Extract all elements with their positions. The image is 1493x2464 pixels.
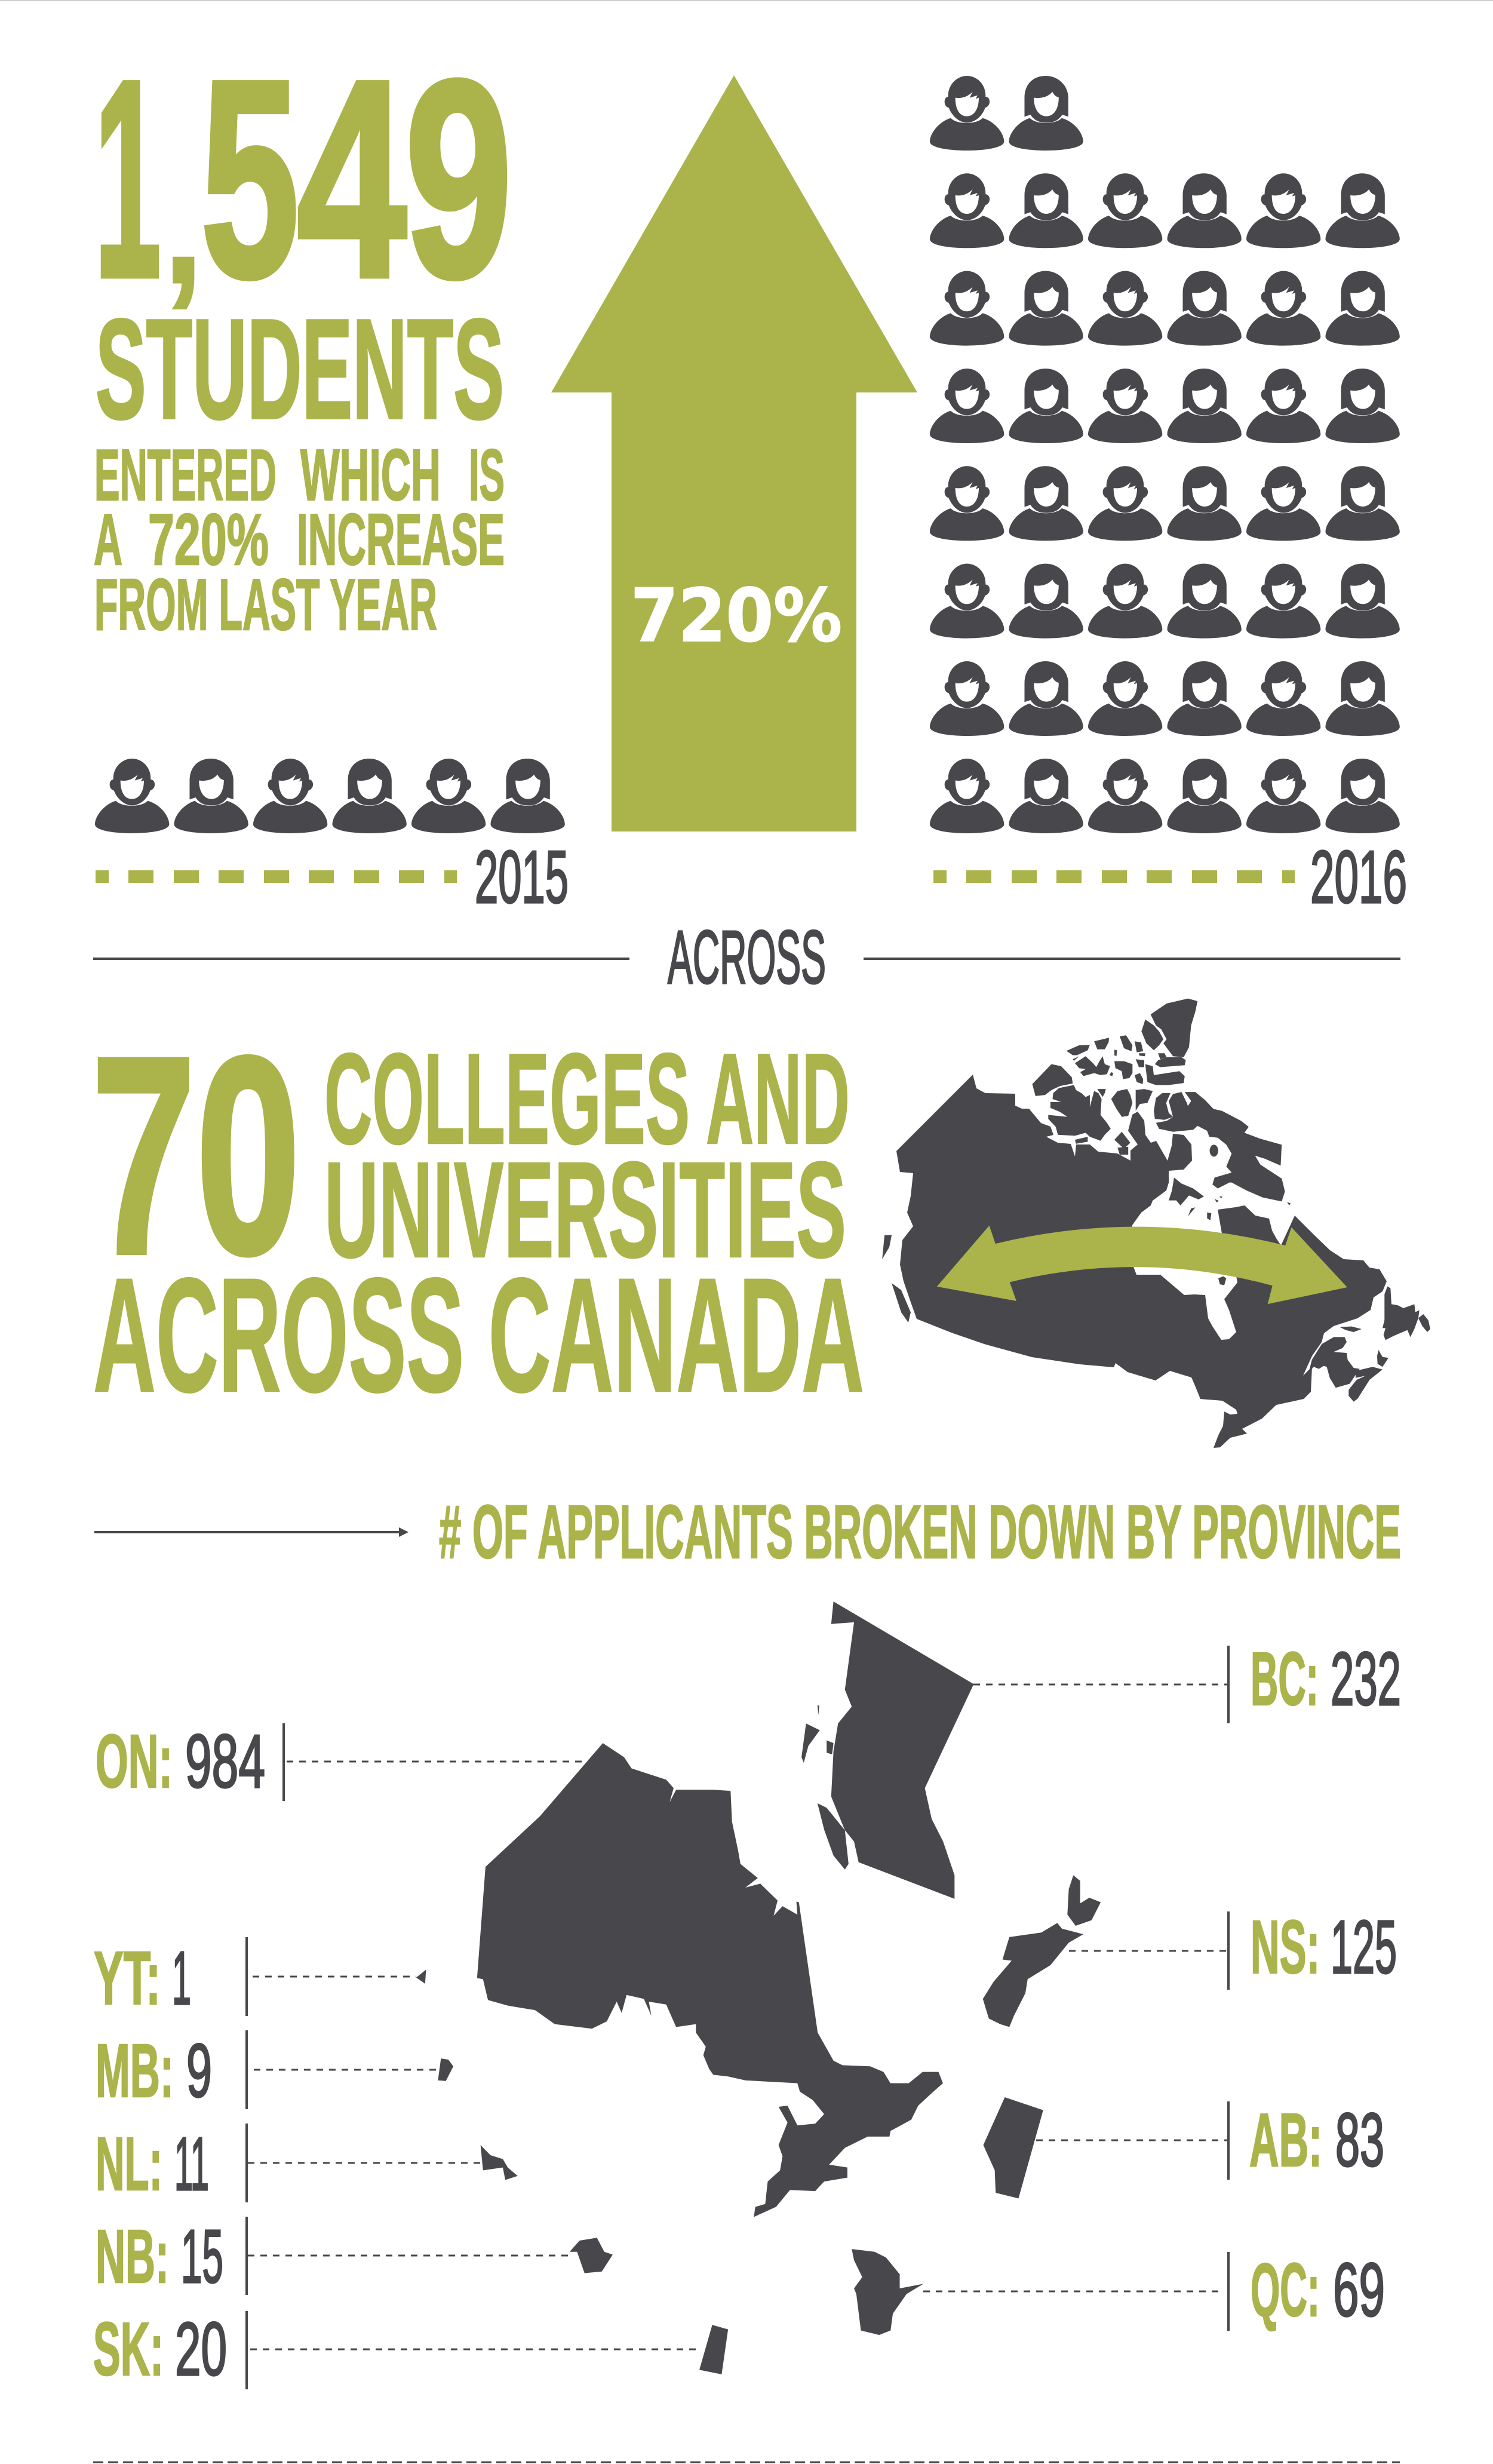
map piece: British Columbia — [801, 1601, 973, 1899]
people icons: 2016 grid — [930, 76, 1400, 833]
label: BC 232 — [973, 1637, 1401, 1723]
label: NB 15: NB: — [96, 2214, 169, 2299]
headline number: 1,549: 4 — [297, 22, 408, 336]
headline number: 1,549: 1 — [94, 22, 161, 336]
label: NB 15 — [96, 2214, 570, 2299]
map piece: Nova Scotia — [983, 1875, 1101, 2027]
people icons: 2015 row — [95, 759, 565, 833]
map piece: Manitoba — [438, 2058, 453, 2081]
label: NL 11: NL: — [96, 2122, 162, 2206]
headline number: 1,549: 9 — [405, 22, 512, 336]
label: NL 11: 11 — [174, 2122, 209, 2206]
map piece: Saskatchewan — [699, 2325, 728, 2374]
label: MB 9: MB: — [96, 2029, 174, 2113]
label: QC 69: 69 — [1333, 2248, 1385, 2332]
label: YT 1: YT: — [94, 1936, 161, 2020]
label: ON 984: 984 — [185, 1719, 265, 1803]
label: YT 1: 1 — [172, 1936, 191, 2020]
heading: 70 colleges and universities across Canada — [91, 999, 864, 1426]
arrow: upward increase with 720%: 720% — [631, 573, 842, 658]
text block: entered which is a 720% increase from last year: 720% — [148, 499, 269, 580]
text block: entered which is a 720% increase from last year: FROM LAST YEAR — [94, 564, 437, 645]
label: SK 20 — [93, 2307, 701, 2391]
label: ON 984: ON: — [96, 1719, 173, 1803]
label: NS 125: NS: — [1251, 1905, 1320, 1989]
timeline: 2015 — [96, 836, 569, 919]
Arctic islands — [1033, 999, 1291, 1220]
label: NL 11 — [96, 2122, 481, 2206]
label: AB 83: AB: — [1249, 2098, 1322, 2182]
heading: 70 colleges and universities across Canada: UNIVERSITIES — [324, 1134, 846, 1286]
label: BC 232: 232 — [1331, 1637, 1401, 1721]
double-headed arrow — [937, 1226, 1347, 1304]
map piece: Yukon — [416, 1969, 426, 1984]
section heading: number of applicants by province — [94, 1490, 1401, 1574]
headline number: 1,549: 5 — [201, 22, 299, 336]
map: Canada with double arrow — [882, 999, 1430, 1448]
label: SK 20: 20 — [175, 2307, 227, 2391]
mainland Canada — [896, 1075, 1387, 1448]
label: NB 15: 15 — [181, 2214, 223, 2299]
label: MB 9: 9 — [186, 2029, 212, 2113]
text: ACROSS — [668, 915, 826, 999]
label: QC 69 — [923, 2248, 1385, 2332]
label: SK 20: SK: — [93, 2307, 164, 2391]
map piece: Quebec — [852, 2249, 923, 2335]
map piece: Ontario — [477, 1743, 943, 2217]
headline number: 1,549 — [94, 22, 512, 336]
arrow: upward increase with 720% — [551, 75, 917, 831]
timeline: 2016 — [933, 836, 1407, 919]
text block: entered which is a 720% increase from last year — [94, 434, 505, 645]
Atlantic provinces and Newfoundland — [1218, 1277, 1430, 1402]
label: NS 125: 125 — [1331, 1905, 1397, 1989]
Pacific islands — [882, 1235, 911, 1322]
heading: 70 colleges and universities across Canada: COLLEGES AND — [324, 1026, 850, 1171]
text block: entered which is a 720% increase from last year: INCREASE — [297, 499, 505, 580]
text block: entered which is a 720% increase from last year: IS — [469, 434, 505, 515]
map piece: Alberta — [984, 2097, 1043, 2198]
label: BC 232: BC: — [1251, 1637, 1319, 1721]
text block: entered which is a 720% increase from last year: A — [94, 499, 122, 580]
label: YT 1 — [94, 1936, 416, 2020]
headline number: 1,549: , — [164, 132, 203, 318]
text block: entered which is a 720% increase from last year: ENTERED — [94, 434, 277, 515]
label: NS 125 — [1069, 1905, 1397, 1990]
timeline: 2015: 2015 — [475, 836, 569, 919]
label: AB 83: 83 — [1335, 2098, 1384, 2182]
map piece: Newfoundland and Labrador — [481, 2145, 518, 2180]
text block: entered which is a 720% increase from last year: WHICH — [300, 434, 441, 515]
heading: students: STUDENTS — [96, 290, 504, 449]
heading: 70 colleges and universities across Canada: 70 — [91, 999, 300, 1312]
label: QC 69: QC: — [1251, 2248, 1320, 2332]
label: ON 984 — [96, 1719, 592, 1803]
map piece: New Brunswick — [570, 2238, 613, 2273]
timeline: 2016: 2016 — [1310, 836, 1407, 919]
label: AB 83 — [1036, 2098, 1384, 2182]
label: MB 9 — [96, 2029, 437, 2113]
